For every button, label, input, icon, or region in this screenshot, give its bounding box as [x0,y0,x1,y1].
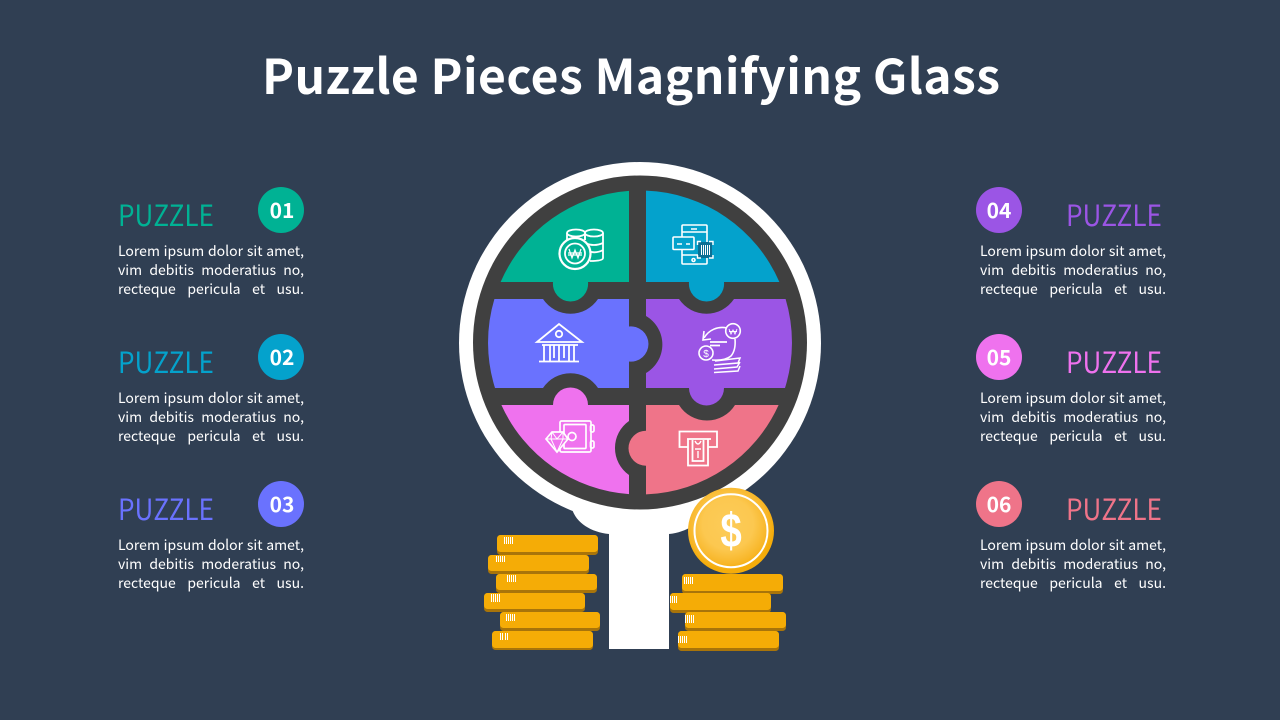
text block 04 [980,241,1166,299]
text block 05 [980,388,1166,446]
heading 04: PUZZLE [1066,193,1162,235]
coin stack left [484,535,600,650]
icon: safe and diamond [546,421,594,452]
number badge 02 [258,334,304,380]
panel: puzzle 06 [976,481,1166,593]
panel: puzzle 04 [976,187,1166,299]
panel: puzzle 01 [118,187,304,299]
number badge 01: 01 [270,195,294,225]
text block 02 [118,388,304,446]
text block 01 [118,241,304,299]
text block 05: recteque pericula et usu. [980,426,1166,446]
text block 06 [980,535,1166,593]
puzzle piece 03 pink [501,387,629,494]
glass dark ring [473,176,807,510]
glass handle [571,505,710,649]
text block 02: recteque pericula et usu. [118,426,304,446]
icon: piggy bank savings: $ [703,349,709,360]
number badge 03 [258,481,304,527]
text block 02: Lorem ipsum dolor sit amet, [118,388,304,408]
text block 03 [118,535,304,593]
heading 02: PUZZLE [118,340,214,382]
icon: piggy bank savings [699,324,740,372]
icon: phone with barcode [673,225,713,264]
text block 01: Lorem ipsum dolor sit amet, [118,241,304,261]
text block 02: vim debitis moderatius no, [118,407,304,427]
panel: puzzle 02 [118,334,304,446]
text block 04: recteque pericula et usu. [980,279,1166,299]
text block 06: vim debitis moderatius no, [980,554,1166,574]
heading 03: PUZZLE [118,487,214,529]
puzzle piece 05 purple [646,299,792,406]
text block 05: vim debitis moderatius no, [980,407,1166,427]
icon: bank [537,324,582,362]
coin stack right [670,574,786,651]
title: Puzzle Pieces Magnifying Glass [262,40,1000,108]
puzzle piece 06 red [629,405,779,494]
heading 01: PUZZLE [118,193,214,235]
text block 03: Lorem ipsum dolor sit amet, [118,535,304,555]
glass white rim [459,162,821,524]
text block 01: recteque pericula et usu. [118,279,304,299]
puzzle piece 01 green [501,191,629,301]
icon: ATM with won note [680,432,717,466]
text block 06: recteque pericula et usu. [980,573,1166,593]
coin tick marks left [492,537,516,640]
number badge 06 [976,481,1022,527]
text block 04: Lorem ipsum dolor sit amet, [980,241,1166,261]
puzzle piece 02 indigo [488,299,648,388]
heading 06: PUZZLE [1066,487,1162,529]
text block 05: Lorem ipsum dolor sit amet, [980,388,1166,408]
text block 04: vim debitis moderatius no, [980,260,1166,280]
coin tick marks right [670,577,694,643]
text block 03: recteque pericula et usu. [118,573,304,593]
puzzle piece 04 blue [646,191,779,301]
number badge 04: 04 [987,195,1011,225]
number badge 05: 05 [987,342,1011,372]
coin bars left [484,535,600,650]
icon: dollar coin: $ [720,505,742,558]
text block 06: Lorem ipsum dolor sit amet, [980,535,1166,555]
number badge 04 [976,187,1022,233]
heading 05: PUZZLE [1066,340,1162,382]
number badge 02: 02 [270,342,294,372]
number badge 01 [258,187,304,233]
icon: coins with won [560,230,603,269]
icon: dollar coin [688,488,774,574]
text block 01: vim debitis moderatius no, [118,260,304,280]
number badge 03: 03 [270,489,294,519]
magnifying glass [459,162,821,649]
number badge 05 [976,334,1022,380]
text block 03: vim debitis moderatius no, [118,554,304,574]
coin bars right [670,574,786,651]
panel: puzzle 03 [118,481,304,593]
panel: puzzle 05 [976,334,1166,446]
number badge 06: 06 [987,489,1011,519]
